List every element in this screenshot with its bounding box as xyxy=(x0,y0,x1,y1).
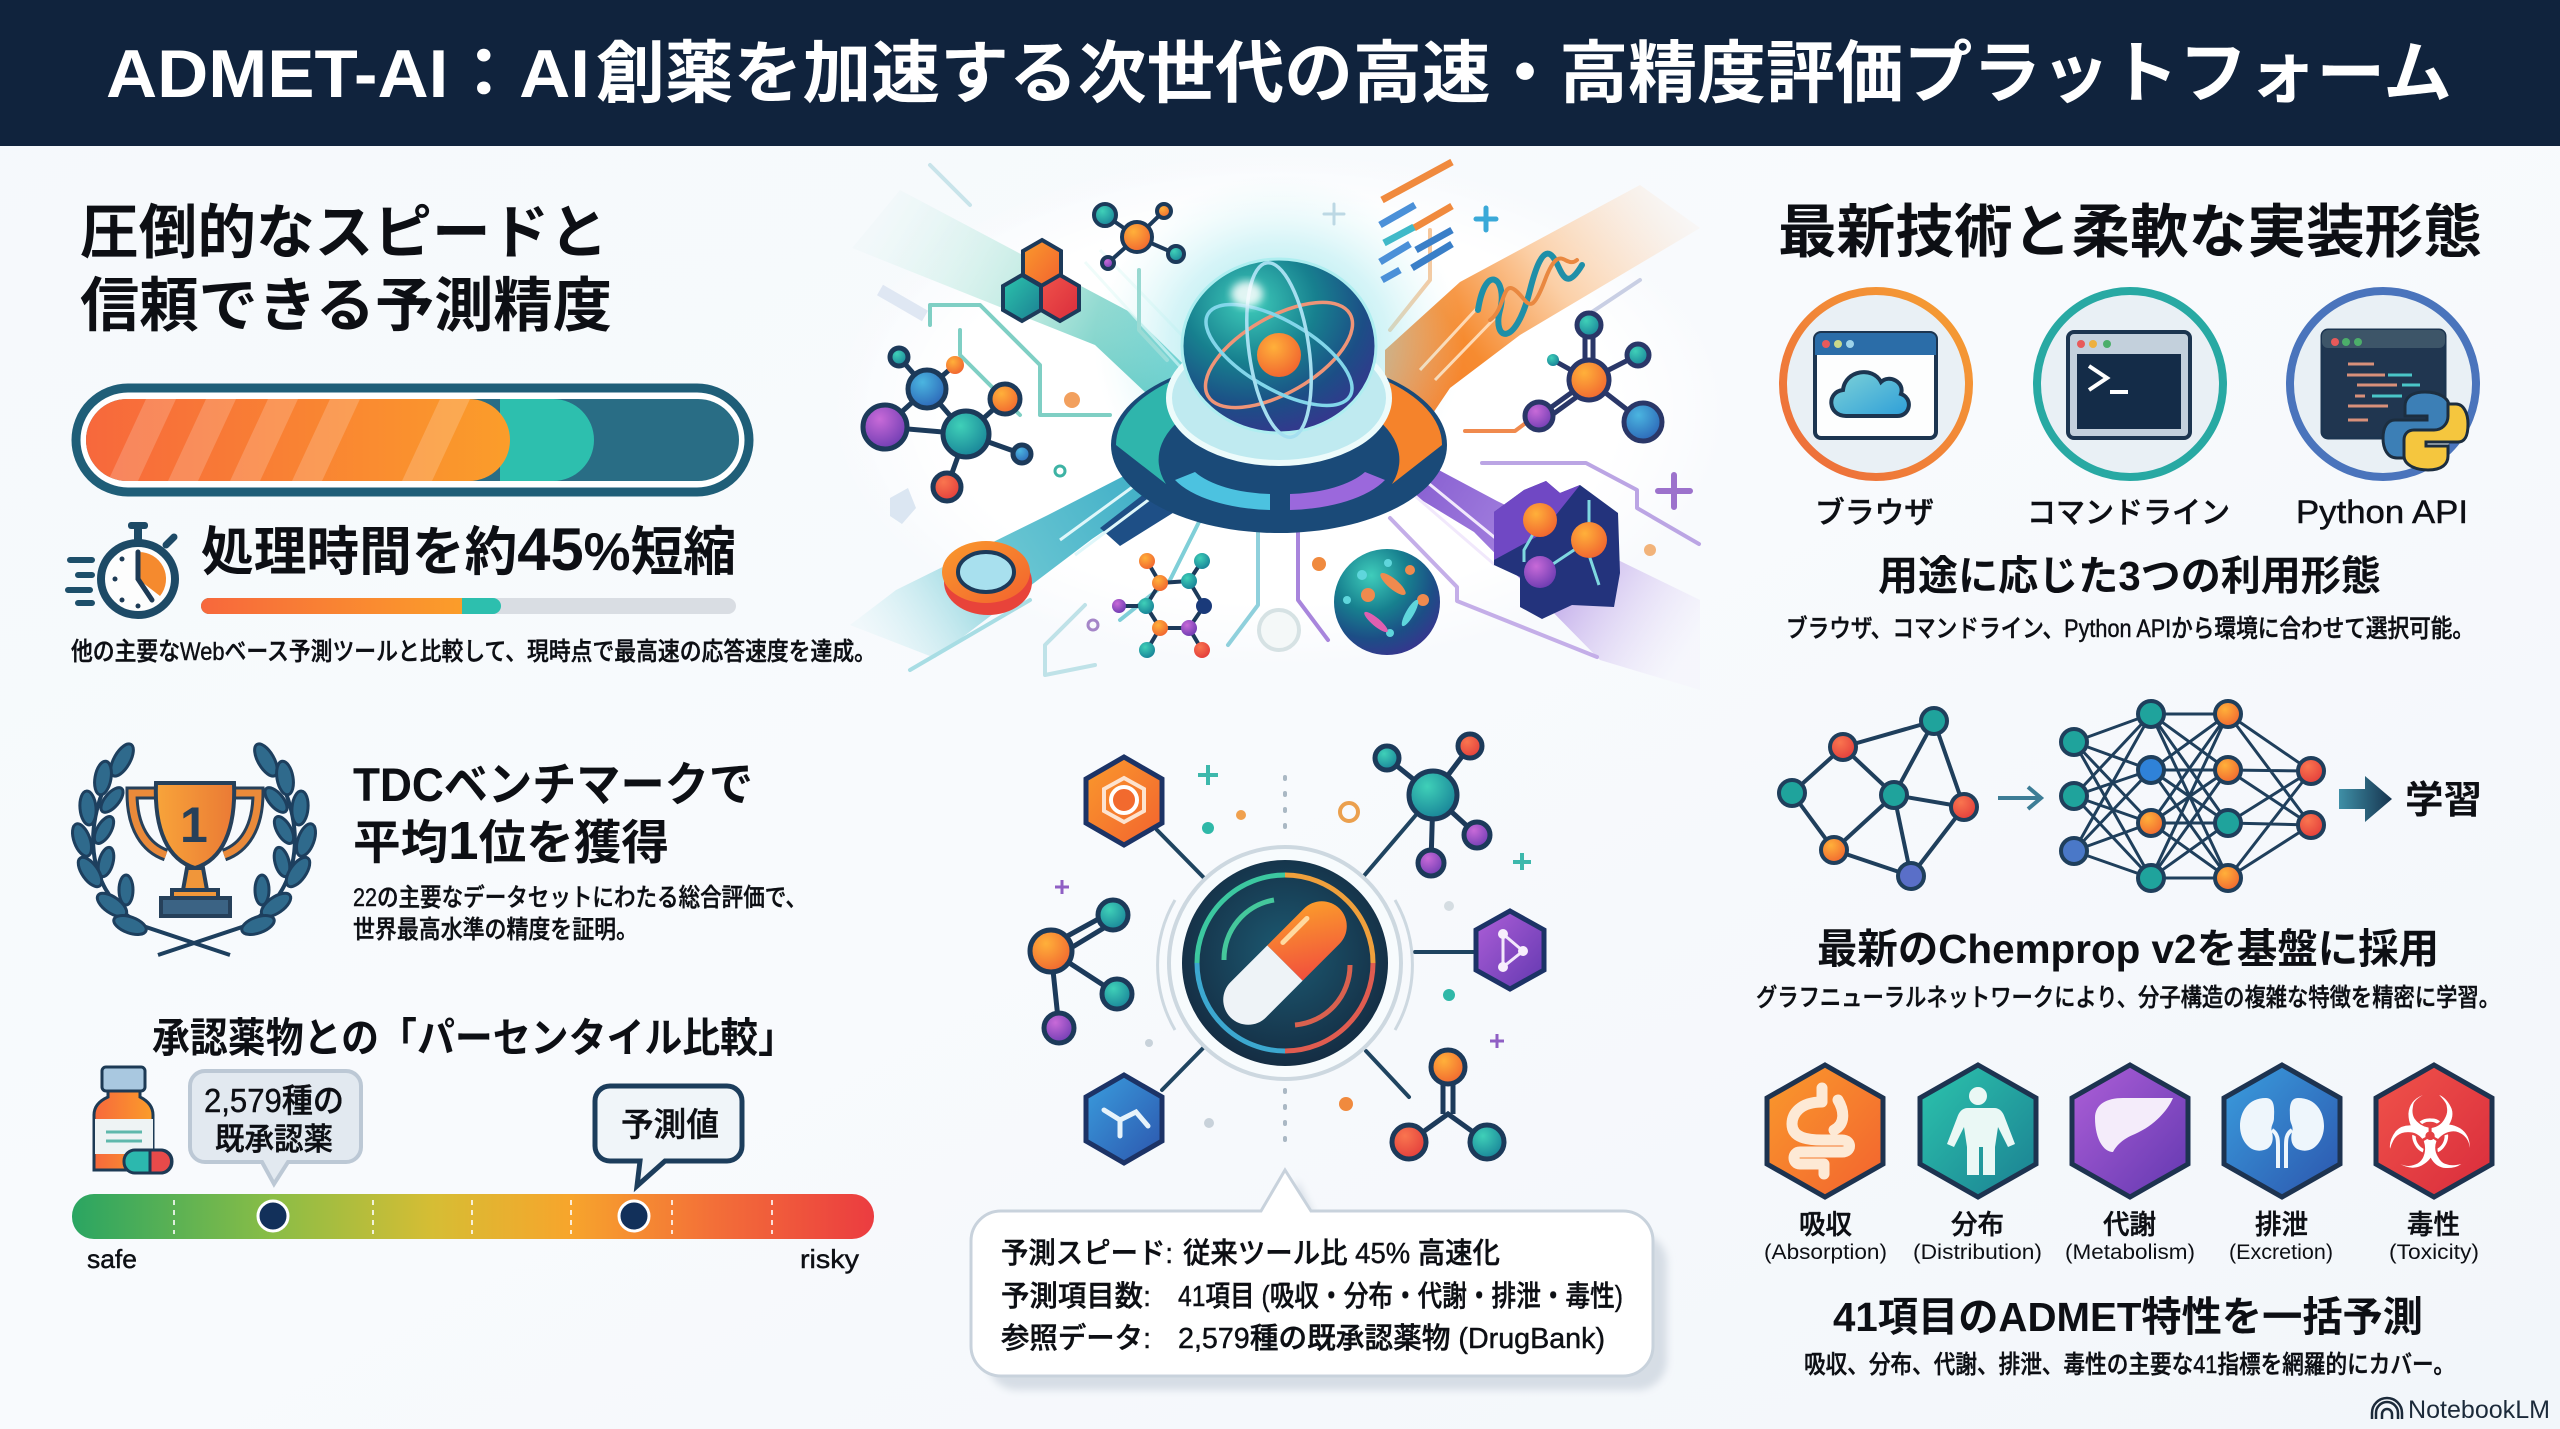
ADMET labels: (Absorption) xyxy=(1764,1241,1887,1264)
section heading: 最新技術と柔軟な実装形態 xyxy=(1778,200,2482,265)
benchmark heading: TDCベンチマークで xyxy=(353,758,753,811)
ADMET labels: 代謝 xyxy=(2103,1210,2156,1240)
badge: toxicity xyxy=(2376,1065,2492,1197)
deployment labels xyxy=(1815,494,2468,530)
badge: excretion xyxy=(2224,1065,2340,1197)
arrow: graph to network xyxy=(1998,787,2041,809)
benchmark description: 22の主要なデータセットにわたる総合評価で、 xyxy=(353,883,807,912)
row: prediction speed: 予測スピード: xyxy=(1001,1237,1173,1270)
badge: metabolism xyxy=(2072,1065,2188,1197)
beams xyxy=(850,185,1700,690)
molecular graph xyxy=(1779,708,1977,889)
icon: browser xyxy=(1783,291,1969,477)
icon: medicine bottle xyxy=(94,1067,172,1173)
cup xyxy=(132,783,258,916)
ADMET labels: (Metabolism) xyxy=(2065,1241,2195,1264)
ADMET labels: 排泄 xyxy=(2255,1210,2308,1240)
callout: predicted value: 予測値 xyxy=(621,1106,719,1143)
benchmark description xyxy=(353,883,807,944)
laurel wreath xyxy=(69,740,319,955)
chemprop heading: 最新のChemprop v2を基盤に採用 xyxy=(1817,926,2439,972)
ADMET labels: (Toxicity) xyxy=(2389,1241,2479,1264)
learning label: 学習 xyxy=(2405,780,2482,822)
icon: python window xyxy=(2290,291,2476,477)
deployment labels: Python API xyxy=(2296,494,2468,530)
title: ADMET-AI：AI xyxy=(106,36,590,112)
code lines xyxy=(1380,162,1452,280)
callout: approved drugs: 2,579種の xyxy=(204,1082,344,1119)
section heading: 圧倒的なスピードと xyxy=(80,200,608,266)
row: reference data: 2,579種の既承認薬物 (DrugBank) xyxy=(1178,1322,1605,1355)
deployment labels: ブラウザ xyxy=(1815,497,1934,530)
ADMET labels: 毒性 xyxy=(2407,1210,2460,1240)
ADMET labels xyxy=(1764,1210,2479,1264)
neural network xyxy=(2061,701,2324,891)
title: 創薬を加速する次世代の高速・高精度評価プラットフォーム xyxy=(596,36,2452,112)
hexagon cluster xyxy=(1003,240,1079,321)
glow xyxy=(1094,175,1464,515)
callout: key figures xyxy=(971,1170,1667,1390)
faint badges and dots xyxy=(880,290,1656,650)
risk scale bar xyxy=(72,1194,874,1239)
molecule: top right xyxy=(1375,734,1490,876)
row: prediction items: 41項目 (吸収・分布・代謝・排泄・毒性) xyxy=(1178,1280,1623,1313)
row: prediction speed xyxy=(1001,1237,1500,1270)
hero illustration: AI core with molecules xyxy=(830,152,1730,690)
DNA helix xyxy=(1478,254,1582,334)
molecule: right xyxy=(1525,313,1662,441)
panel: percentile comparison xyxy=(72,1015,874,1274)
ADMET heading: 41項目のADMET特性を一括予測 xyxy=(1833,1294,2423,1340)
badge: toxicity: ☣ xyxy=(2385,1075,2475,1192)
icon: trophy with laurel xyxy=(69,740,319,955)
deployment description: ブラウザ、コマンドライン、Python APIから環境に合わせて選択可能。 xyxy=(1786,615,2474,643)
molecule: top centre xyxy=(1094,204,1184,269)
icon: trophy with laurel: 1 xyxy=(180,797,208,853)
deployment labels: コマンドライン xyxy=(2027,497,2230,530)
connectors xyxy=(1157,777,1474,1140)
benchmark heading xyxy=(353,758,753,871)
scale labels xyxy=(87,1244,859,1274)
deployment heading: 用途に応じた3つの利用形態 xyxy=(1878,553,2381,599)
section heading xyxy=(80,200,612,339)
badge: absorption xyxy=(1767,1065,1883,1197)
callout: approved drugs xyxy=(190,1071,361,1184)
row: prediction items xyxy=(1001,1280,1623,1313)
scale labels: risky xyxy=(800,1244,859,1274)
icon hexagons xyxy=(1086,757,1544,1163)
molecule: left xyxy=(863,348,1031,501)
ADMET labels: 分布 xyxy=(1951,1210,2004,1240)
icon: terminal xyxy=(2037,291,2223,477)
section heading: 信頼できる予測精度 xyxy=(80,273,612,339)
ADMET labels: 吸収 xyxy=(1799,1210,1852,1240)
hexagon glyphs xyxy=(1104,778,1528,1136)
callout: predicted value xyxy=(595,1086,742,1186)
row: reference data: 参照データ: xyxy=(1001,1322,1151,1355)
molecule: bottom right xyxy=(1392,1050,1504,1159)
benchmark heading: 平均1位を獲得 xyxy=(353,811,669,871)
45% headline: 処理時間を約45%短縮 xyxy=(201,516,736,583)
molecule: left xyxy=(1030,900,1132,1043)
row: prediction speed: 従来ツール比 45% 高速化 xyxy=(1183,1237,1500,1270)
pill dial xyxy=(1158,847,1412,1079)
accents xyxy=(1055,765,1531,1128)
microbe sphere xyxy=(1334,549,1440,655)
scale labels: safe xyxy=(87,1244,137,1274)
circuit traces xyxy=(910,165,1699,675)
molecule: hexagon ring xyxy=(1112,553,1212,658)
panel: benchmark xyxy=(69,740,807,955)
percentile heading: 承認薬物との「パーセンタイル比較」 xyxy=(152,1015,796,1061)
panel: speed and accuracy xyxy=(68,200,876,666)
large progress bar xyxy=(76,388,749,492)
description: 他の主要なWebベース予測ツールと比較して、現時点で最高速の応答速度を達成。 xyxy=(71,638,876,666)
row: reference data xyxy=(1001,1322,1605,1355)
arrow: to learning xyxy=(2339,776,2392,822)
core platform xyxy=(1111,333,1447,533)
ADMET labels: (Excretion) xyxy=(2229,1241,2333,1264)
ADMET description: 吸収、分布、代謝、排泄、毒性の主要な41指標を網羅的にカバー。 xyxy=(1804,1351,2455,1379)
header bar with title xyxy=(0,0,2560,146)
ADMET labels: (Distribution) xyxy=(1913,1241,2042,1264)
badge: distribution xyxy=(1920,1065,2036,1197)
orb with atom xyxy=(1182,259,1376,441)
callout: approved drugs: 既承認薬 xyxy=(215,1122,333,1157)
panel: drug hub illustration xyxy=(971,734,1667,1390)
icon: stopwatch xyxy=(68,522,175,615)
NotebookLM credit: NotebookLM xyxy=(2408,1396,2550,1424)
panel: technology and deployment xyxy=(1756,200,2500,1379)
row: prediction items: 予測項目数: xyxy=(1001,1280,1151,1313)
ring lens xyxy=(942,541,1032,615)
python logo xyxy=(2383,392,2468,470)
benchmark description: 世界最高水準の精度を証明。 xyxy=(353,916,638,944)
plus signs xyxy=(1324,204,1690,507)
protein block xyxy=(1494,481,1620,619)
ADMET badges xyxy=(1767,1065,2492,1197)
small progress bar xyxy=(201,598,736,614)
